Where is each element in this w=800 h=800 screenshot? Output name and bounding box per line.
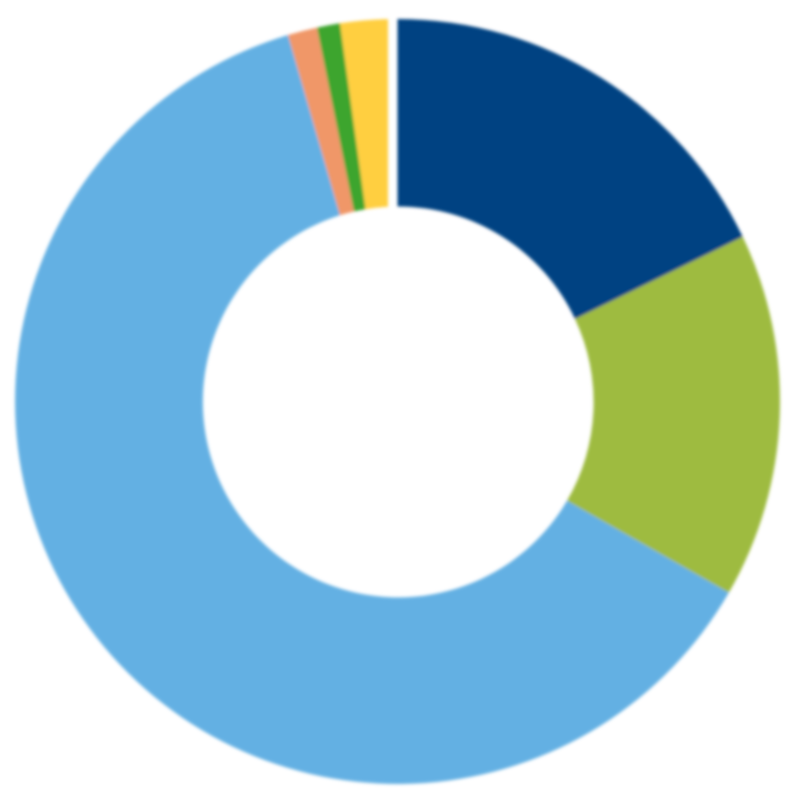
segment: dark blue [398,19,743,319]
segment: orange [288,28,354,215]
segment: green [317,23,366,211]
segment: olive green [567,237,780,593]
segment: yellow [340,19,388,209]
